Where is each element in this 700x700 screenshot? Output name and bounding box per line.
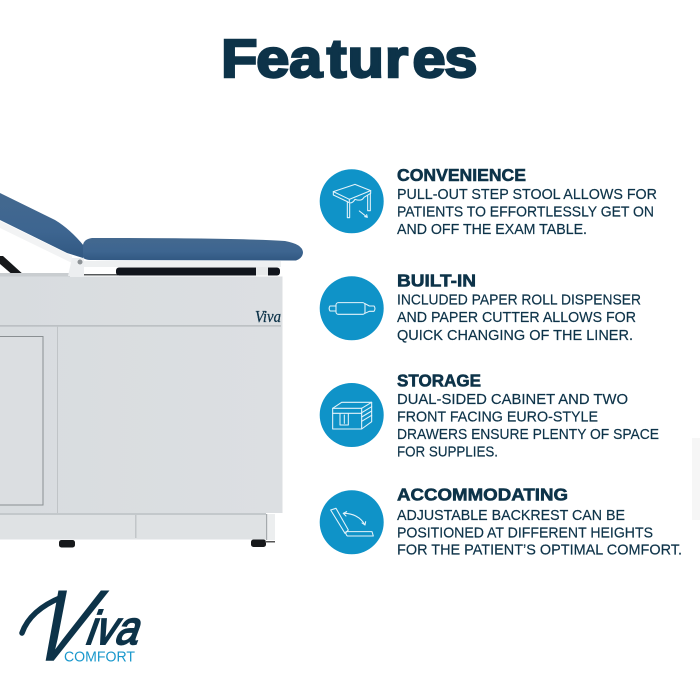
text block: PULL-OUT STEP STOOL ALLOWS FOR	[397, 186, 657, 203]
logo swash flourish	[22, 597, 62, 633]
text block: AND PAPER CUTTER ALLOWS FOR	[397, 309, 636, 326]
heading: BUILT-IN	[397, 271, 476, 291]
feature: convenience	[320, 165, 657, 238]
icon: adjustable backrest	[320, 490, 384, 554]
heading: STORAGE	[397, 370, 481, 390]
heading: CONVENIENCE	[397, 165, 526, 185]
seat cushion	[83, 238, 303, 260]
backrest cushion	[0, 193, 84, 258]
text block: ADJUSTABLE BACKREST CAN BE	[397, 507, 625, 524]
logo sub word: COMFORT	[64, 648, 135, 666]
icon: paper roll	[320, 276, 384, 340]
table feet	[59, 540, 275, 548]
text block: FOR SUPPLIES.	[397, 443, 498, 460]
title: Features	[221, 29, 477, 89]
text block: POSITIONED AT DIFFERENT HEIGHTS	[397, 524, 653, 541]
text block	[397, 391, 659, 460]
text block: AND OFF THE EXAM TABLE.	[397, 221, 587, 238]
logo script word: iva	[80, 602, 151, 655]
feature: built-in	[320, 271, 641, 344]
text block: DUAL-SIDED CABINET AND TWO	[397, 391, 628, 408]
cabinet door	[0, 336, 43, 505]
heading: ACCOMMODATING	[397, 485, 568, 505]
text block: DRAWERS ENSURE PLENTY OF SPACE	[397, 426, 659, 443]
logo script initial: V	[14, 570, 119, 682]
icon: cabinet	[320, 383, 384, 447]
text block	[397, 291, 641, 344]
logo: Viva Comfort	[14, 570, 151, 682]
text block: FOR THE PATIENT’S OPTIMAL COMFORT.	[397, 541, 682, 558]
text block	[397, 186, 657, 238]
feature: accommodating	[320, 485, 682, 558]
text block: PATIENTS TO EFFORTLESSLY GET ON	[397, 204, 654, 221]
feature: storage	[320, 370, 659, 460]
text block: QUICK CHANGING OF THE LINER.	[397, 327, 633, 344]
small brand mark on cabinet: Viva	[255, 307, 281, 326]
table base kick plate	[0, 513, 275, 540]
text block: INCLUDED PAPER ROLL DISPENSER	[397, 291, 641, 308]
icon: step stool	[320, 169, 384, 233]
white frame and mechanism	[0, 221, 281, 276]
cabinet body	[0, 276, 282, 513]
product photo: exam table	[0, 193, 303, 548]
text block: FRONT FACING EURO-STYLE	[397, 409, 598, 426]
text block	[397, 507, 682, 558]
